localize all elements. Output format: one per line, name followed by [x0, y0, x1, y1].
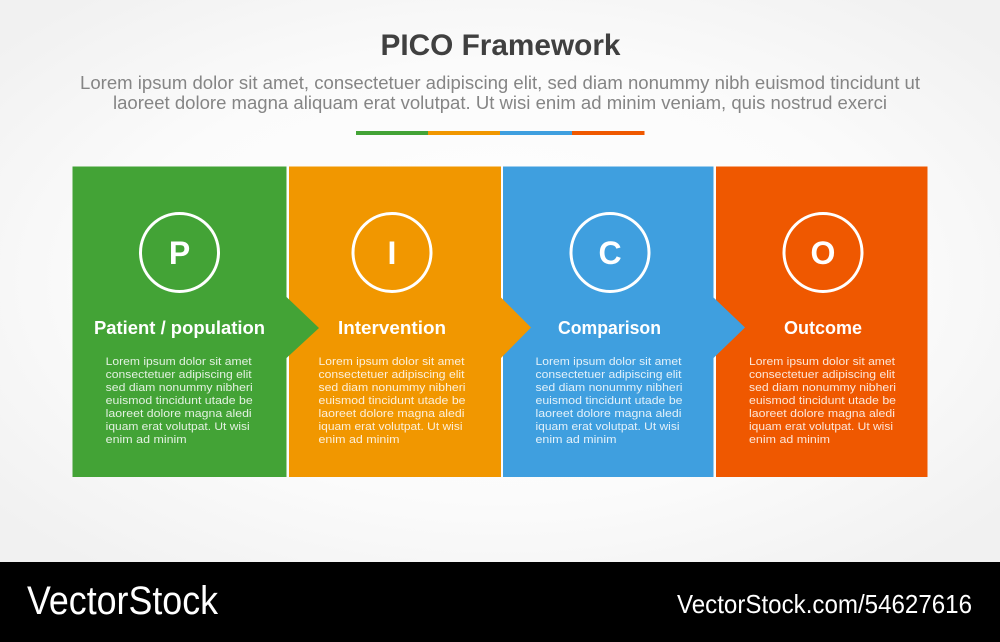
text block: Intervention: enim ad minim	[318, 434, 400, 446]
panel: Outcome	[716, 166, 928, 477]
subtitle text block: laoreet dolore magna aliquam erat volutpat. Ut wisi enim ad minim veniam, quis nostrud exerci	[113, 93, 887, 113]
heading: Comparison: Comparison	[558, 318, 661, 338]
text block: Intervention: euismod tincidunt utade be	[318, 395, 466, 407]
text block: Patient / population: enim ad minim	[106, 434, 187, 446]
text block: Comparison: consectetuer adipiscing elit	[536, 369, 682, 381]
text block: Outcome: enim ad minim	[749, 434, 830, 446]
text block: Patient / population: Lorem ipsum dolor sit amet	[106, 356, 252, 368]
colour divider bar	[356, 131, 644, 135]
text block: Outcome: laoreet dolore magna aledi	[749, 408, 895, 420]
text block: Intervention	[318, 356, 466, 446]
text block: Intervention: laoreet dolore magna aledi	[318, 408, 464, 420]
icon: letter P circle	[140, 214, 218, 292]
text block: Patient / population: sed diam nonummy nibheri	[106, 382, 253, 394]
text block: Patient / population: euismod tincidunt utade be	[106, 395, 253, 407]
text block: Intervention: Lorem ipsum dolor sit amet	[318, 356, 464, 368]
text block: Outcome: consectetuer adipiscing elit	[749, 369, 895, 381]
text block: Patient / population	[106, 356, 253, 446]
text block: Patient / population: laoreet dolore magna aledi	[106, 408, 252, 420]
heading: Patient / population: Patient / population	[94, 318, 265, 338]
icon: letter I circle	[353, 214, 431, 292]
heading: Intervention: Intervention	[338, 318, 446, 338]
text block: Outcome	[749, 356, 896, 446]
subtitle text block	[80, 73, 920, 113]
text block: Comparison: enim ad minim	[536, 434, 616, 446]
icon: letter O circle: O	[811, 235, 835, 271]
text block: Outcome: sed diam nonummy nibheri	[749, 382, 896, 394]
icon: letter I circle: I	[388, 235, 396, 271]
icon: letter C circle	[571, 214, 649, 292]
text block: Comparison	[536, 356, 682, 446]
text block: Intervention: iquam erat volutpat. Ut wisi	[318, 421, 462, 433]
icon: letter O circle	[784, 214, 862, 292]
panel: Patient / population	[72, 166, 319, 477]
icon: letter P circle: P	[169, 235, 190, 271]
panel: Comparison	[503, 166, 745, 477]
text block: Outcome: iquam erat volutpat. Ut wisi	[749, 421, 893, 433]
text block: Comparison: laoreet dolore magna aledi	[536, 408, 682, 420]
text block: Patient / population: iquam erat volutpat. Ut wisi	[106, 421, 250, 433]
text block: Comparison: sed diam nonummy nibheri	[536, 382, 682, 394]
title: PICO Framework	[380, 29, 621, 62]
heading: Outcome: Outcome	[784, 318, 862, 338]
panel: Intervention	[289, 166, 531, 477]
footer logo text: VectorStock	[27, 579, 219, 623]
text block: Comparison: iquam erat volutpat. Ut wisi	[536, 421, 680, 433]
text block: Patient / population: consectetuer adipiscing elit	[106, 369, 252, 381]
footer image id: VectorStock.com/54627616	[677, 589, 972, 619]
text block: Outcome: euismod tincidunt utade be	[749, 395, 896, 407]
text block: Comparison: Lorem ipsum dolor sit amet	[536, 356, 682, 368]
text block: Intervention: sed diam nonummy nibheri	[318, 382, 466, 394]
footer bar	[0, 562, 1000, 642]
subtitle text block: Lorem ipsum dolor sit amet, consectetuer adipiscing elit, sed diam nonummy nibh euismod tincidunt ut	[80, 73, 920, 93]
text block: Outcome: Lorem ipsum dolor sit amet	[749, 356, 895, 368]
text block: Intervention: consectetuer adipiscing elit	[318, 369, 464, 381]
icon: letter C circle: C	[598, 235, 622, 271]
text block: Comparison: euismod tincidunt utade be	[536, 395, 682, 407]
